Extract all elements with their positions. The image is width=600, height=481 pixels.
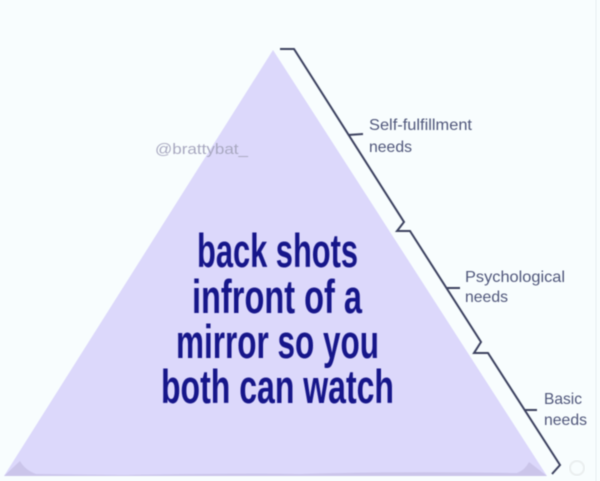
label: psychological needs: Psychological <box>465 269 565 286</box>
label: psychological needs: needs <box>465 289 508 306</box>
main text: infront of a <box>192 270 363 323</box>
main text: both can watch <box>161 360 394 413</box>
label: basic needs: needs <box>544 412 587 429</box>
label: self-fulfillment needs <box>369 117 473 156</box>
label: basic needs <box>544 391 587 429</box>
label: self-fulfillment needs: Self-fulfillment <box>369 117 473 134</box>
main text <box>161 224 394 413</box>
bracket <box>280 49 560 474</box>
label: psychological needs <box>465 269 565 306</box>
main text: mirror so you <box>176 315 379 368</box>
main text: back shots <box>197 224 358 277</box>
label: basic needs: Basic <box>544 391 582 408</box>
watermark: @brattybat_ <box>155 141 249 158</box>
label: self-fulfillment needs: needs <box>369 139 412 156</box>
icon: faint circle <box>570 461 584 475</box>
